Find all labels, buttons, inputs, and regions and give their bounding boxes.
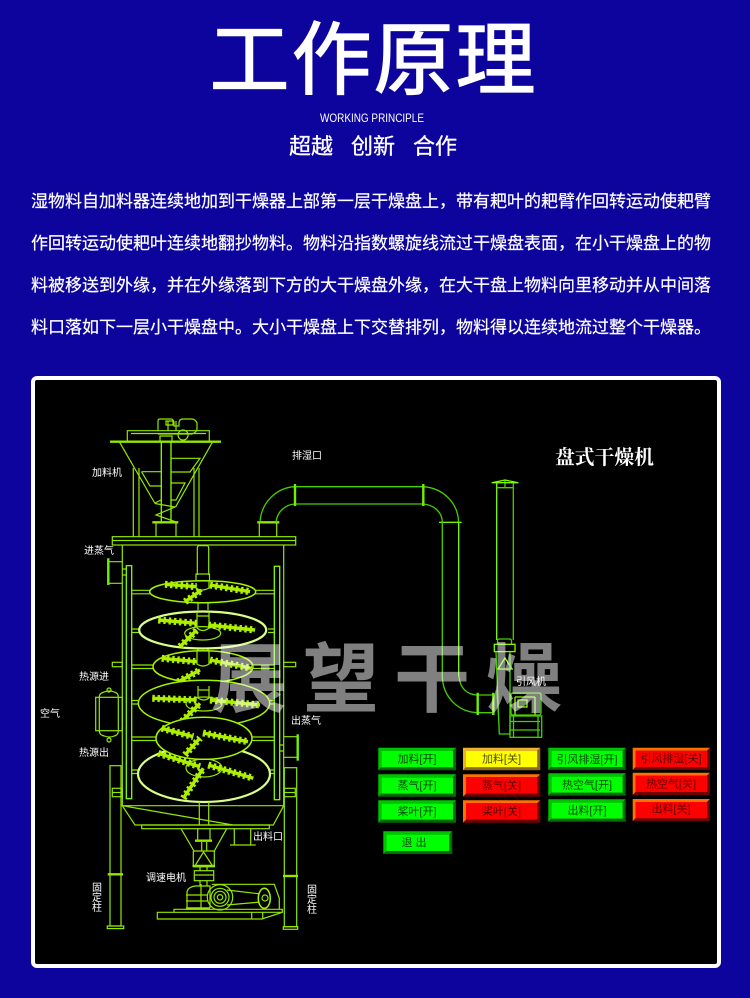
discharge outlet [230,829,256,845]
button: discharge on: 出料[开] [567,803,607,817]
button: discharge on [548,799,626,822]
exhaust stack [492,480,518,640]
diagram labels: 热源出 [79,746,109,759]
steam outlet [280,734,298,761]
button: discharge off [633,799,710,821]
exhaust duct [257,484,493,715]
machine title: 盘式干燥机 [555,447,654,469]
button: fan on [548,748,626,770]
watermark: 燥 [486,638,562,723]
diagram labels: 柱 [307,903,317,916]
fixed column left [107,766,124,929]
button: steam off [463,774,540,797]
button: hot air on: 热空气[开] [562,778,612,792]
button: paddle off: 桨叶[关] [482,804,521,818]
description text block [31,191,711,337]
button: hot air off [633,773,710,795]
bottom hopper [122,802,284,867]
dryer body shell [108,537,296,806]
diagram labels: 加料机 [92,466,122,479]
button: feed off yellow [463,748,540,770]
diagram labels: 定 [307,893,317,906]
subtitle english: WORKING PRINCIPLE [320,113,424,125]
diagram labels: 空气 [40,707,60,720]
button: discharge off: 出料[关] [651,802,691,816]
diagram labels: 进蒸气 [84,544,114,557]
diagram labels: 出蒸气 [291,714,321,727]
watermark: 望 [303,638,379,723]
diagram labels: 固 [307,884,317,896]
button: feed off yellow: 加料[关] [482,752,521,766]
button: steam off: 蒸气[关] [482,778,521,792]
button: fan on: 引风排湿[开] [556,752,618,766]
button: hot air on [548,773,626,796]
description text block: 料口落如下一层小干燥盘中。大小干燥盘上下交替排列，物料得以连续地流过整个干燥器。 [31,318,711,337]
control buttons [378,748,710,854]
diagram labels: 引风机 [516,675,546,688]
button: steam on: 蒸气[开] [397,778,437,792]
disc 6 [138,746,270,802]
button: feed on [378,748,456,770]
button: exit: 退 出 [401,835,427,849]
slogan [289,134,457,159]
central shaft [196,546,210,768]
disc 2 [139,612,266,648]
disc supports [132,590,274,774]
title: 工作原理 [210,16,536,105]
diagram labels: 固 [92,882,102,894]
diagram labels [40,449,546,916]
disc 4 [138,680,270,726]
drive motor [157,867,282,919]
diagram labels: 热源进 [79,670,109,683]
diagram labels: 柱 [92,901,102,914]
slogan: 创新 [351,134,395,159]
slogan: 超越 [289,134,333,159]
drying discs [138,580,270,802]
diagram labels: 排湿口 [292,449,322,462]
button: paddle on [378,800,456,823]
watermark: 展 [211,638,287,723]
diagram labels: 出料口 [253,830,283,843]
fixed column right [283,768,298,929]
description text block: 料被移送到外缘，并在外缘落到下方的大干燥盘外缘，在大干盘上物料向里移动并从中间落 [31,276,711,295]
watermark [211,638,562,723]
disc 1 [150,580,256,603]
watermark: 干 [394,638,470,723]
induced draft fan [494,639,542,737]
button: hot air off: 热空气[关] [646,776,696,790]
disc 3 [153,650,253,683]
diagram labels: 定 [92,891,102,904]
description text block: 湿物料自加料器连续地加到干燥器上部第一层干燥盘上，带有耙叶的耙臂作回转运动使耙臂 [31,191,711,211]
button: paddle on: 桨叶[开] [397,804,437,818]
button: fan off: 引风排湿[关] [640,751,702,765]
disc 5 [156,717,252,759]
button: paddle off [463,800,540,823]
button: fan off [633,748,710,770]
air heater [96,688,122,742]
button: feed on: 加料[开] [397,752,437,766]
diagram labels: 调速电机 [146,871,186,884]
button: exit [383,831,452,854]
feeder machine [110,419,221,537]
panel: dryer diagram [33,378,719,966]
description text block: 作回转运动使耙叶连续地翻抄物料。物料沿指数螺旋线流过干燥盘表面，在小干燥盘上的物 [31,233,711,253]
button: steam on [378,774,456,797]
slogan: 合作 [413,134,457,159]
